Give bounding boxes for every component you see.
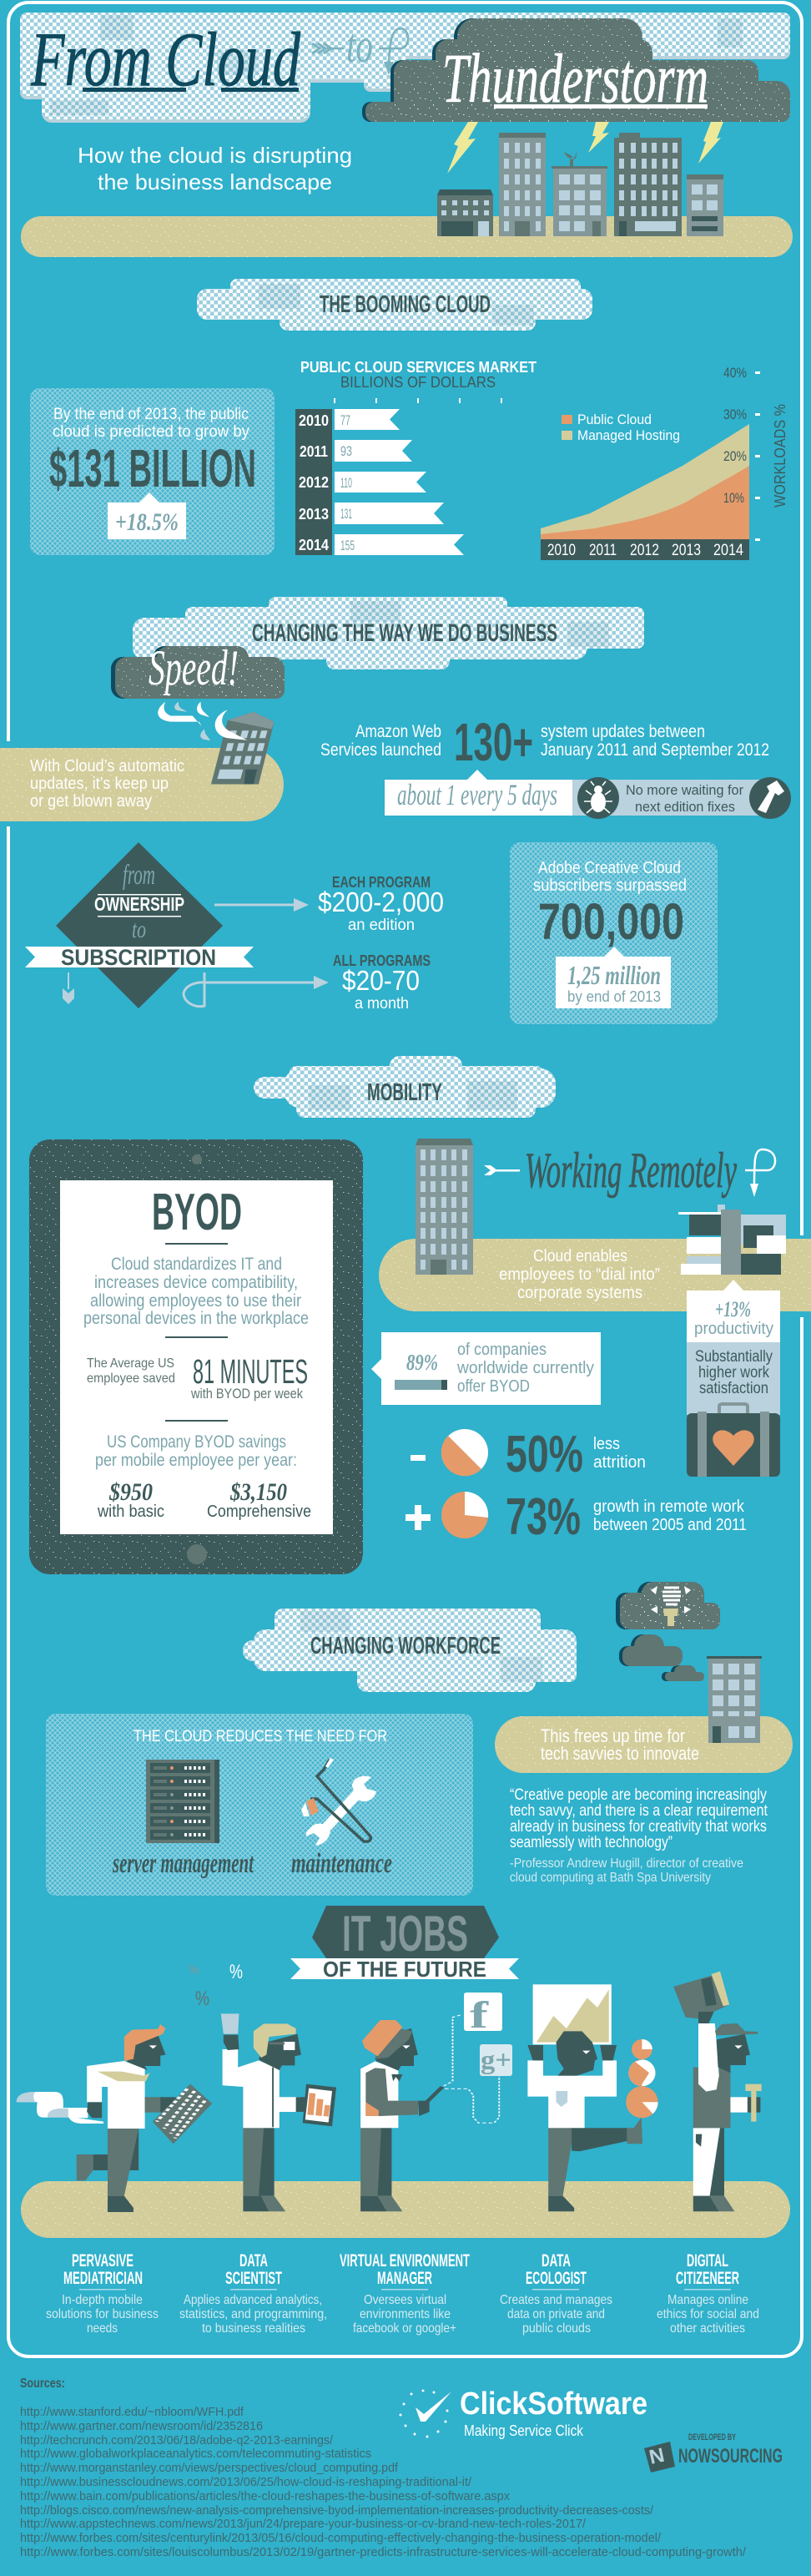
- bar chart: public cloud services market: 110: [340, 475, 352, 491]
- area chart: workloads: [541, 365, 788, 560]
- callout: 89% offer BYOD: [371, 1332, 601, 1405]
- job: data ecologist: DATA: [542, 2251, 571, 2270]
- sources: [20, 2376, 747, 2559]
- section heading: The Booming Cloud: [197, 279, 592, 331]
- stat: 50% less attrition: less: [593, 1435, 620, 1453]
- panel: $131 billion: cloud is predicted to grow by: [53, 423, 249, 441]
- job: data ecologist: public clouds: [522, 2321, 591, 2336]
- logo: ClickSoftware: ClickSoftware: [460, 2387, 647, 2422]
- job: data scientist: [179, 2251, 327, 2336]
- building 1: [437, 189, 493, 236]
- pricing: all programs: [333, 952, 431, 1013]
- callout: 1,25 million: by end of 2013: [567, 988, 661, 1005]
- stat: 81 minutes: [87, 1352, 308, 1402]
- job: pervasive mediatrician: solutions for business: [46, 2307, 159, 2321]
- quote: “Creative people are becoming increasingly: [510, 1786, 767, 1804]
- pricing: each program: [318, 874, 444, 934]
- title: From Cloud: From Cloud: [30, 17, 301, 102]
- stat: 81 minutes: employee saved: [87, 1371, 175, 1386]
- banner: IT Jobs of the Future: [290, 1906, 519, 1982]
- job: pervasive mediatrician: [46, 2251, 159, 2336]
- panel: $131 billion: [30, 388, 275, 555]
- panel: $131 billion: $131 BILLION: [49, 438, 256, 498]
- ground pill: [21, 216, 793, 257]
- pricing: each program: EACH PROGRAM: [332, 874, 431, 891]
- arrow: to all programs: [184, 972, 329, 1007]
- chart heading: BILLIONS OF DOLLARS: [340, 374, 496, 391]
- legend: Managed Hosting: [577, 427, 680, 443]
- icon: bug: [577, 777, 619, 819]
- building 4: [614, 133, 682, 236]
- % symbols: %: [195, 1988, 209, 2010]
- stat: Amazon 130+ updates: 130+: [454, 712, 533, 772]
- pricing: each program: an edition: [348, 917, 415, 934]
- job: data scientist: statistics, and programming,: [179, 2307, 327, 2321]
- pricing: each program: $200-2,000: [318, 886, 444, 917]
- title connector: to: to: [346, 18, 373, 73]
- section heading: Mobility: MOBILITY: [367, 1079, 442, 1106]
- header: white cloud: [20, 13, 790, 123]
- icon: tilted building in wind: [158, 702, 275, 785]
- callout: productivity: [687, 1280, 780, 1342]
- job: virtual environment manager: facebook or google+: [353, 2321, 456, 2336]
- stat: 50% less attrition: 50%: [506, 1426, 583, 1483]
- callout: productivity: productivity: [694, 1320, 773, 1338]
- callout: 89% offer BYOD: 89%: [406, 1350, 438, 1375]
- BYOD description: [83, 1255, 309, 1328]
- panel: work satisfaction: satisfaction: [699, 1380, 768, 1397]
- quote: -Professor Andrew Hugill, director of creative: [510, 1856, 743, 1871]
- panel: Adobe Creative Cloud: 700,000: [538, 893, 684, 950]
- BYOD description: personal devices in the workplace: [83, 1309, 309, 1328]
- bar chart: public cloud services market: 2012: [299, 474, 329, 491]
- section heading: Changing Workforce: CHANGING WORKFORCE: [310, 1633, 501, 1659]
- icon: facebook: f: [470, 1993, 489, 2036]
- sources: http://www.gartner.com/newsroom/id/2352816: [20, 2419, 263, 2433]
- job: digital citizeneer: other activities: [670, 2321, 745, 2336]
- panel: work satisfaction: Substantially: [695, 1348, 773, 1366]
- sources: http://www.globalworkplaceanalytics.com/telecommuting-statistics: [20, 2447, 371, 2461]
- diamond: ownership to subscription: to: [132, 916, 146, 943]
- section heading: The Booming Cloud: THE BOOMING CLOUD: [320, 291, 491, 318]
- figure: virtual environment manager: [360, 2015, 499, 2211]
- sources: http://www.forbes.com/sites/centurylink/2013/05/16/cloud-computing-effectively-changing-the-business-operation-model/: [20, 2531, 662, 2545]
- figure: digital citizeneer: [673, 1972, 762, 2211]
- arrow: to each program: [214, 898, 309, 912]
- job: pervasive mediatrician: needs: [87, 2321, 118, 2336]
- area chart: workloads: 2013: [672, 542, 701, 559]
- Speed cloud: Speed!: [149, 640, 239, 695]
- callout: productivity: +13%: [715, 1297, 751, 1321]
- stat: savings: Comprehensive: [207, 1503, 311, 1521]
- job: pervasive mediatrician: In-depth mobile: [62, 2293, 143, 2307]
- icon: wrench and tool: [301, 1758, 376, 1846]
- tan pill: automatic updates: or get blown away: [30, 792, 152, 811]
- stat: Amazon 130+ updates: system updates between: [541, 722, 705, 741]
- stat: 81 minutes: The Average US: [87, 1356, 174, 1371]
- quote: [510, 1786, 768, 1885]
- axis labels: [723, 365, 788, 541]
- bar chart: public cloud services market: 2014: [299, 537, 329, 553]
- legend: [562, 412, 680, 443]
- subtitle: the business landscape: [98, 169, 332, 194]
- tan pill: automatic updates: With Cloud’s automatic: [30, 757, 184, 775]
- panel: $131 billion: By the end of 2013, the public: [53, 406, 249, 423]
- stat: savings: with basic: [97, 1503, 164, 1521]
- tan pill: dial into: corporate systems: [517, 1284, 642, 1302]
- banner: IT Jobs of the Future: IT JOBS: [342, 1906, 468, 1962]
- subtitle: How the cloud is disrupting: [78, 143, 352, 168]
- logo: ClickSoftware: Making Service Click: [464, 2422, 584, 2439]
- axis labels: WORKLOADS %: [772, 404, 788, 508]
- diamond: ownership to subscription: OWNERSHIP: [94, 893, 184, 915]
- logo: ClickSoftware: [399, 2387, 647, 2439]
- stat: Amazon 130+ updates: Amazon Web: [355, 722, 441, 741]
- callout: +18.5%: [108, 492, 186, 539]
- job: digital citizeneer: DIGITAL: [687, 2251, 728, 2270]
- stat: savings: per mobile employee per year:: [95, 1451, 297, 1470]
- dark storm cloud: [362, 18, 790, 122]
- stat: 50% less attrition: [411, 1426, 646, 1483]
- panel: the cloud reduces the need for: [46, 1714, 473, 1896]
- bar chart: public cloud services market: 2013: [299, 506, 329, 523]
- subtitle: [78, 143, 352, 194]
- section heading: Mobility: [254, 1056, 556, 1118]
- job: data ecologist: ECOLOGIST: [526, 2269, 587, 2288]
- icon: lightbulb cloud: [616, 1582, 720, 1629]
- tan pill: dial into: [379, 1239, 811, 1311]
- chart heading: [300, 359, 536, 391]
- axis labels: 10%: [723, 490, 744, 506]
- callout: about 1 every 5 days: [385, 770, 572, 816]
- sources: http://www.businesscloudnews.com/2013/06/25/how-cloud-is-reshaping-traditional-it/: [20, 2475, 472, 2489]
- stat: savings: [95, 1432, 311, 1521]
- tan pill: frees up time: [495, 1716, 793, 1773]
- figure: pervasive mediatrician: [17, 2024, 212, 2212]
- chart heading: PUBLIC CLOUD SERVICES MARKET: [300, 359, 536, 376]
- stat: 81 minutes: 81 MINUTES: [193, 1352, 308, 1391]
- icon: facebook: [464, 1993, 502, 2036]
- lightning bolts: [447, 122, 723, 174]
- job: digital citizeneer: [657, 2251, 759, 2336]
- job: digital citizeneer: CITIZENEER: [676, 2269, 739, 2288]
- quote: cloud computing at Bath Spa University: [510, 1871, 711, 1885]
- sources: http://techcrunch.com/2013/06/18/adobe-q2-2013-earnings/: [20, 2433, 334, 2447]
- sources: http://blogs.cisco.com/news/new-analysis-comprehensive-byod-implementation-increases-productivity-decreases-costs/: [20, 2503, 654, 2518]
- stat: 73% growth in remote work: between 2005 and 2011: [593, 1516, 747, 1534]
- BYOD description: increases device compatibility,: [94, 1273, 298, 1292]
- pricing: all programs: ALL PROGRAMS: [333, 952, 431, 969]
- area chart: workloads: 2012: [630, 542, 659, 559]
- section heading: Changing the way we do business: [133, 597, 644, 669]
- stat: 73% growth in remote work: 73%: [506, 1488, 581, 1546]
- pricing: all programs: $20-70: [342, 965, 420, 996]
- stat: 50% less attrition: attrition: [593, 1453, 646, 1472]
- building 2: [499, 133, 546, 236]
- job: virtual environment manager: VIRTUAL ENVIRONMENT: [340, 2251, 470, 2270]
- panel: work satisfaction: [687, 1342, 780, 1415]
- BYOD description: Cloud standardizes IT and: [111, 1255, 282, 1274]
- panel: work satisfaction: higher work: [698, 1364, 769, 1381]
- diamond: ownership to subscription: SUBSCRIPTION: [61, 945, 216, 970]
- title connector: to: [312, 18, 408, 75]
- job: data ecologist: [500, 2251, 612, 2336]
- tan pill: dial into: employees to “dial into”: [499, 1265, 660, 1284]
- bar chart: public cloud services market: 77: [340, 412, 350, 428]
- figure: data scientist: [221, 2013, 336, 2211]
- quote: already in business for creativity that works: [510, 1818, 767, 1836]
- bar chart: public cloud services market: 2011: [300, 443, 328, 460]
- buildings: [437, 133, 723, 236]
- stat: Amazon 130+ updates: January 2011 and September 2012: [541, 740, 769, 760]
- axis labels: 30%: [723, 407, 747, 422]
- callout: 89% offer BYOD: offer BYOD: [457, 1377, 530, 1396]
- icon: house: [678, 1205, 786, 1275]
- sources: http://www.stanford.edu/~nbloom/WFH.pdf: [20, 2405, 244, 2419]
- label: maintenance: maintenance: [291, 1848, 392, 1879]
- bar chart: public cloud services market: 93: [340, 443, 352, 459]
- tan pill: automatic updates: [0, 748, 284, 821]
- axis labels: 20%: [723, 448, 747, 464]
- callout: no more waiting: [572, 777, 791, 819]
- icon: hammer: [749, 777, 791, 819]
- diamond: ownership to subscription: [25, 842, 254, 1008]
- icon: office tower: [416, 1139, 473, 1275]
- area chart: workloads: 2014: [713, 542, 743, 559]
- sources: http://www.morganstanley.com/views/perspectives/cloud_computing.pdf: [20, 2461, 399, 2475]
- bar chart: public cloud services market: 131: [340, 506, 352, 522]
- callout: 1,25 million: 1,25 million: [567, 960, 661, 990]
- callout: about 1 every 5 days: about 1 every 5 days: [397, 778, 557, 811]
- panel: Adobe Creative Cloud: Adobe Creative Cloud: [538, 859, 681, 877]
- panel: Adobe Creative Cloud: [510, 842, 718, 1024]
- axis labels: 40%: [723, 365, 747, 381]
- quote: tech savvy, and there is a clear requirement: [510, 1802, 768, 1820]
- job: digital citizeneer: Manages online: [667, 2293, 748, 2307]
- area chart: workloads: 2010: [547, 542, 576, 559]
- tablet: BYOD: BYOD: [152, 1184, 242, 1241]
- % symbols: %: [189, 1963, 199, 1977]
- job: data scientist: Applies advanced analytics,: [184, 2293, 322, 2307]
- tan pill: dial into: Cloud enables: [533, 1247, 627, 1265]
- job: pervasive mediatrician: PERVASIVE: [72, 2251, 133, 2270]
- callout: 1,25 million: [556, 947, 671, 1008]
- stat: savings: $3,150: [229, 1478, 287, 1506]
- job: data scientist: SCIENTIST: [225, 2269, 282, 2288]
- logo: NowSourcing: [644, 2432, 783, 2472]
- section heading: Changing the way we do business: CHANGING THE WAY WE DO BUSINESS: [252, 619, 557, 647]
- job: virtual environment manager: Oversees virtual: [364, 2293, 446, 2307]
- tablet: BYOD: [29, 1139, 363, 1574]
- label: server management: server management: [112, 1848, 254, 1879]
- icon: server rack: [146, 1760, 219, 1843]
- job: digital citizeneer: ethics for social and: [657, 2307, 759, 2321]
- stat: savings: US Company BYOD savings: [107, 1432, 286, 1452]
- job: virtual environment manager: MANAGER: [377, 2269, 432, 2288]
- stat: savings: $950: [108, 1478, 153, 1506]
- sources: http://www.appstechnews.com/news/2013/jun/24/prepare-your-business-or-cv-brand-new-tech-roles-2017/: [20, 2517, 587, 2531]
- legend: Public Cloud: [577, 412, 652, 427]
- quote: seamlessly with technology”: [510, 1834, 672, 1851]
- stat: 73% growth in remote work: [406, 1488, 747, 1546]
- tan pill: frees up time: This frees up time for: [541, 1725, 685, 1746]
- tan pill: automatic updates: updates, it’s keep up: [30, 775, 169, 793]
- callout: no more waiting: next edition fixes: [635, 799, 735, 815]
- panel: the cloud reduces the need for: THE CLOUD REDUCES THE NEED FOR: [133, 1728, 387, 1745]
- icon: google plus: g+: [481, 2044, 511, 2074]
- figure: data ecologist: [527, 1984, 658, 2211]
- stat: Amazon 130+ updates: Services launched: [320, 740, 441, 760]
- small arrow: [63, 972, 74, 1004]
- building 3 with satellite dish: [552, 151, 607, 236]
- icon: building right: [707, 1656, 762, 1743]
- diamond: ownership to subscription: from: [123, 860, 155, 891]
- panel: Adobe Creative Cloud: subscribers surpassed: [533, 876, 687, 895]
- stat: 81 minutes: with BYOD per week: [190, 1386, 303, 1402]
- icon: small clouds: [619, 1634, 704, 1681]
- % symbols: %: [229, 1961, 243, 1983]
- callout: 89% offer BYOD: of companies: [457, 1341, 547, 1359]
- sources: Sources:: [20, 2376, 65, 2391]
- bar chart: public cloud services market: [295, 398, 502, 555]
- stat: Amazon 130+ updates: [320, 712, 769, 772]
- job: virtual environment manager: [340, 2251, 470, 2336]
- bar chart: public cloud services market: 155: [340, 538, 355, 553]
- ground pill: jobs: [21, 2181, 790, 2238]
- job: data ecologist: data on private and: [507, 2307, 605, 2321]
- area chart: workloads: 2011: [589, 542, 617, 559]
- job: data scientist: to business realities: [202, 2321, 305, 2336]
- job: data ecologist: Creates and manages: [500, 2293, 612, 2307]
- logo: NowSourcing: N: [647, 2444, 667, 2469]
- pricing: all programs: a month: [355, 995, 409, 1013]
- job: data scientist: DATA: [239, 2251, 268, 2270]
- stat: 73% growth in remote work: growth in remote work: [593, 1498, 745, 1516]
- sources: http://www.bain.com/publications/articles/the-cloud-reshapes-the-business-of-software.aspx: [20, 2489, 510, 2503]
- job: pervasive mediatrician: MEDIATRICIAN: [63, 2269, 143, 2288]
- sources: http://www.forbes.com/sites/louiscolumbus/2013/02/19/gartner-predicts-infrastructure-services-will-accelerate-cloud-computing-growth/: [20, 2545, 747, 2559]
- icon: suitcase with heart: [687, 1404, 780, 1477]
- logo: NowSourcing: DEVELOPED BY: [688, 2432, 736, 2442]
- callout: no more waiting: No more waiting for: [626, 782, 743, 798]
- tan pill: frees up time: tech savvies to innovate: [541, 1743, 699, 1764]
- BYOD description: allowing employees to use their: [90, 1291, 301, 1311]
- bar chart: public cloud services market: 2010: [299, 412, 329, 429]
- job: virtual environment manager: environments like: [360, 2307, 451, 2321]
- callout: +18.5%: +18.5%: [115, 508, 179, 536]
- banner: IT Jobs of the Future: OF THE FUTURE: [323, 1957, 486, 1982]
- building 5: [687, 174, 723, 236]
- callout: 89% offer BYOD: worldwide currently: [456, 1359, 594, 1377]
- % symbols: [189, 1961, 243, 2010]
- section heading: Changing Workforce: [243, 1609, 577, 1692]
